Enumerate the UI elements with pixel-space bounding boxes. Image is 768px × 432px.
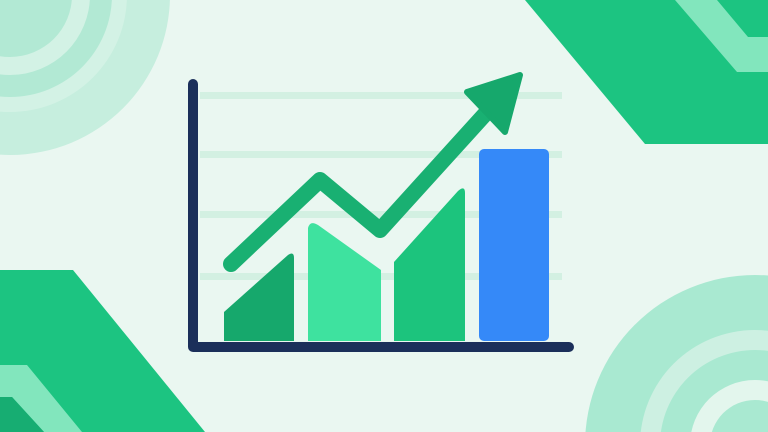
decoration: bottom-right concentric circles bbox=[585, 275, 768, 432]
bar 2 bbox=[308, 223, 381, 341]
decoration: top-left concentric circles bbox=[0, 0, 170, 155]
bar 4 blue bbox=[479, 149, 549, 341]
trend arrow bbox=[231, 75, 520, 264]
decoration: bottom-left green band bbox=[0, 270, 205, 432]
bar 3 bbox=[394, 188, 465, 341]
axes bbox=[193, 84, 569, 347]
bar 1 bbox=[224, 254, 294, 341]
gridlines bbox=[200, 92, 562, 280]
decoration: top-right green band bbox=[525, 0, 768, 144]
